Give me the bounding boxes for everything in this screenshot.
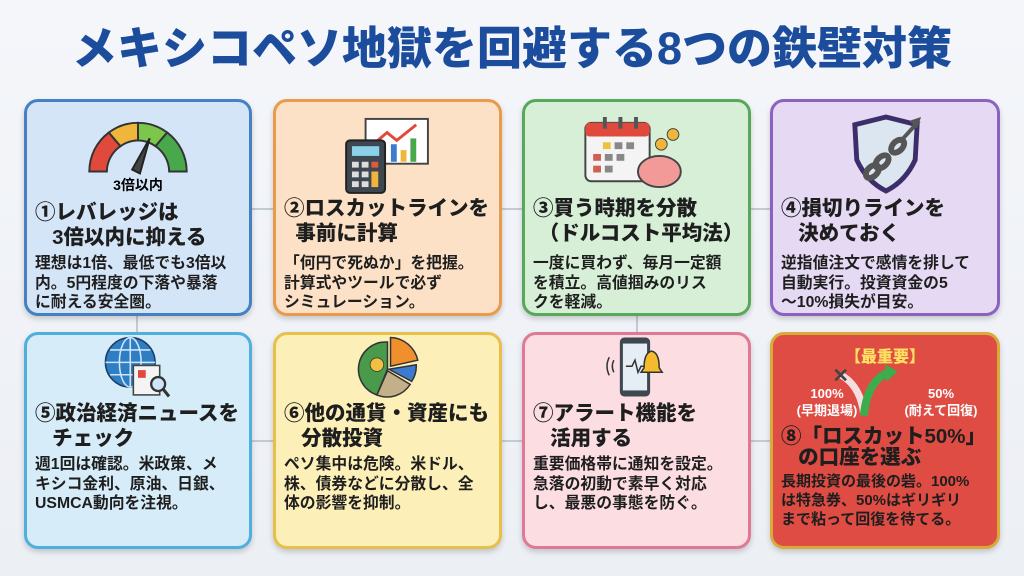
heading: 活用する <box>550 427 632 450</box>
text: に耐える安全圏。 <box>35 294 161 311</box>
heading <box>35 201 206 249</box>
panel: timing <box>522 99 751 316</box>
text: USMCA動向を注視。 <box>35 495 188 512</box>
heading <box>35 402 239 450</box>
label: most important: 【最重要】 <box>845 349 925 366</box>
label: 50% <box>904 386 978 418</box>
text: 「何円で死ぬか」を把握。 <box>284 255 474 272</box>
text: 自動実行。投資資金の5 <box>781 274 948 292</box>
icon: gauge <box>88 122 188 175</box>
heading: ③買う時期を分散 <box>533 197 697 220</box>
icon: fork arrow <box>834 364 898 416</box>
panel: alert <box>522 332 751 549</box>
text <box>35 455 225 512</box>
heading: 3倍以内に抑える <box>52 226 206 249</box>
label: 100% <box>797 386 857 418</box>
heading <box>284 402 489 450</box>
label: 100%: (早期退場) <box>797 403 857 418</box>
icon: calculator chart <box>345 118 429 194</box>
heading: ⑥他の通貨・資産にも <box>284 402 489 425</box>
text: 株、債券などに分散し、全 <box>284 476 474 492</box>
text <box>533 455 723 512</box>
icon: phone bell <box>606 338 664 396</box>
heading: の口座を選ぶ <box>798 446 921 469</box>
text: は特急券、50%はギリギリ <box>781 492 961 509</box>
text <box>284 455 474 512</box>
text: シミュレーション。 <box>284 294 425 311</box>
heading <box>533 402 697 450</box>
text: クを軽減。 <box>533 294 612 311</box>
title: メキシコペソ地獄を回避する8つの鉄壁対策 <box>72 23 952 74</box>
text <box>781 473 969 528</box>
text: 計算式やツールで必ず <box>284 274 442 292</box>
panel: stop loss <box>770 99 1000 316</box>
text: 一度に買わず、毎月一定額 <box>533 255 721 272</box>
text: 重要価格帯に通知を設定。 <box>533 456 723 473</box>
heading: ②ロスカットラインを <box>284 197 489 220</box>
heading: ①レバレッジは <box>35 201 178 224</box>
panel: news <box>24 332 252 549</box>
icon: pie <box>358 336 419 398</box>
text: 長期投資の最後の砦。100% <box>781 473 969 490</box>
panel: diversify <box>273 332 502 549</box>
text: 体の影響を抑制。 <box>284 495 410 512</box>
text: 急落の初動で素早く対応 <box>533 476 707 492</box>
heading: 事前に計算 <box>295 222 398 245</box>
text: を積立。高値掴みのリス <box>533 274 707 292</box>
panel: leverage <box>24 99 252 316</box>
heading: 決めておく <box>798 222 900 245</box>
heading: チェック <box>52 427 134 450</box>
heading: ④損切りラインを <box>781 197 945 220</box>
heading: ⑧「ロスカット50%」 <box>781 425 986 448</box>
heading: ⑦アラート機能を <box>533 402 697 425</box>
text: 理想は1倍、最低でも3倍以 <box>35 255 226 272</box>
heading <box>781 197 945 245</box>
text <box>533 254 722 311</box>
label: 100%: 100% <box>810 386 844 401</box>
text: ～10%損失が目安。 <box>781 294 923 311</box>
panel: most important <box>770 332 1000 549</box>
icon: calendar piggy <box>584 116 682 188</box>
text: 内。5円程度の下落や暴落 <box>35 274 218 292</box>
icon: shield chain <box>852 114 921 194</box>
text <box>284 254 474 311</box>
text: キシコ金利、原油、日銀、 <box>35 476 225 492</box>
text <box>35 254 226 311</box>
label: 50%: 50% <box>928 386 954 401</box>
text: まで粘って回復を待てる。 <box>781 511 960 528</box>
panel: loss cut calc <box>273 99 502 316</box>
heading <box>533 197 743 245</box>
text: ペソ集中は危険。米ドル、 <box>284 456 474 473</box>
heading: 分散投資 <box>301 427 383 450</box>
panel: leverage: 3倍以内 <box>113 177 163 193</box>
text: 逆指値注文で感情を排して <box>781 255 970 272</box>
text: し、最悪の事態を防ぐ。 <box>533 495 707 512</box>
text <box>781 254 970 311</box>
icon: globe news <box>104 336 170 398</box>
heading <box>781 425 986 469</box>
label: 50%: (耐えて回復) <box>904 403 978 418</box>
text: 週1回は確認。米政策、メ <box>35 456 218 473</box>
heading: ⑤政治経済ニュースを <box>35 402 239 425</box>
heading <box>284 197 489 245</box>
heading: （ドルコスト平均法） <box>539 222 743 245</box>
